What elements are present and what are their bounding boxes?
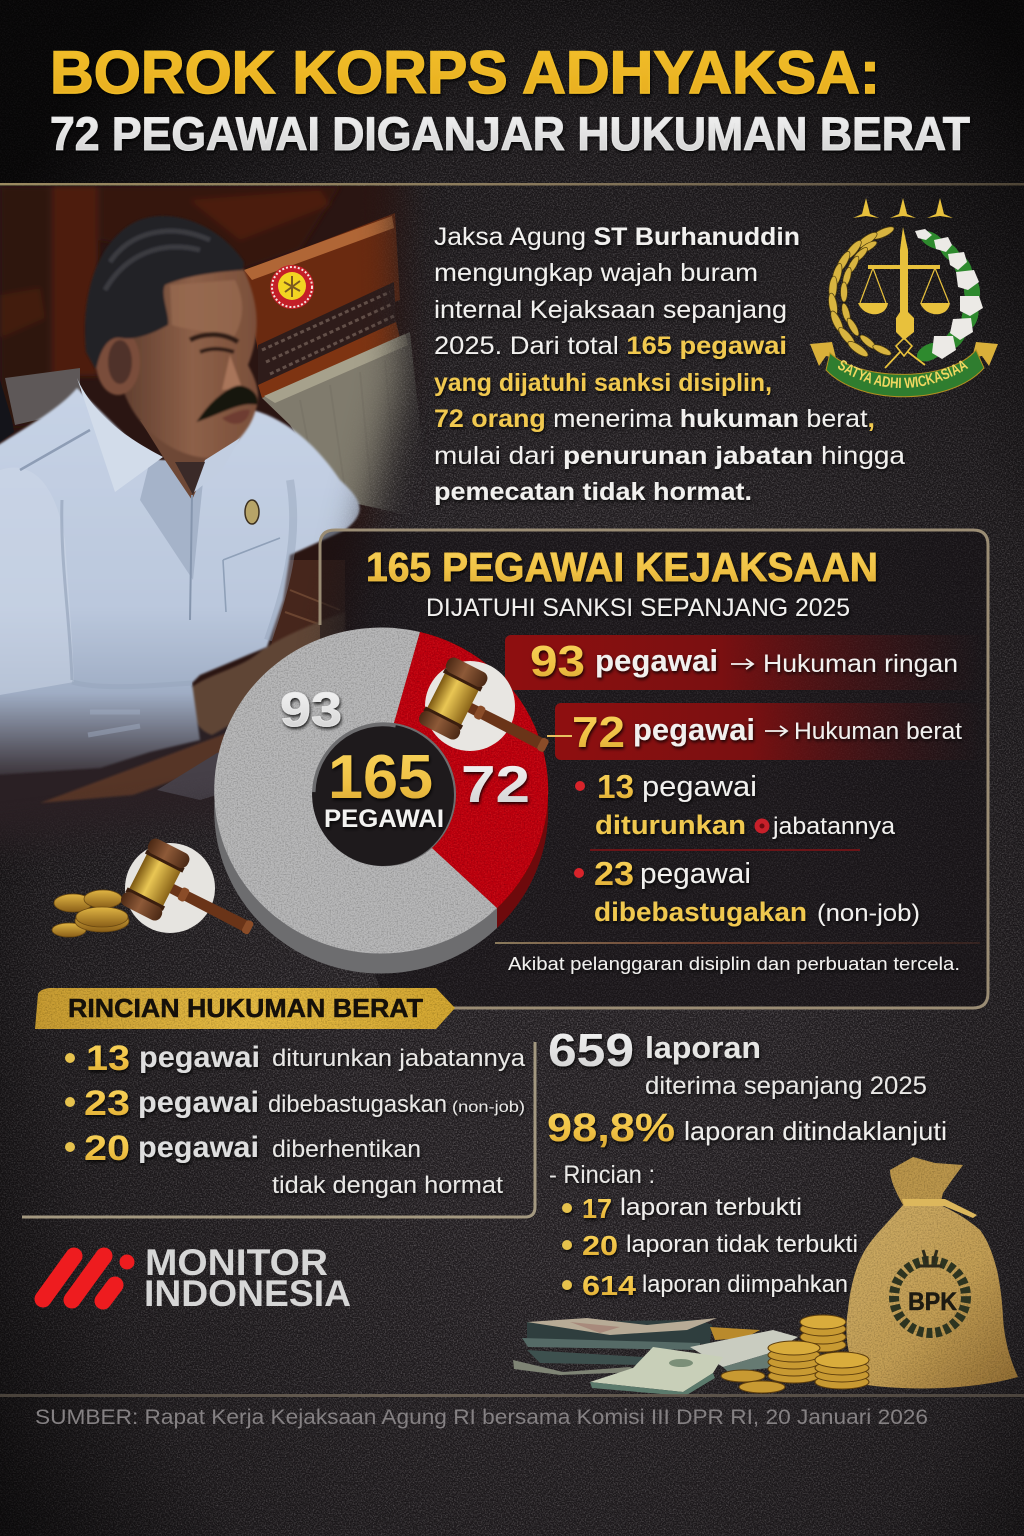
statistics: laporan: laporan terbukti: [620, 1194, 802, 1221]
title: 72 PEGAWAI DIGANJAR HUKUMAN BERAT: [50, 107, 970, 160]
banner: hukuman ringan: 93: [530, 637, 585, 686]
intro paragraph: pemecatan tidak hormat.: [434, 478, 752, 506]
donut chart: 93 vs 72: [214, 628, 572, 974]
panel: rincian list: 13: [86, 1039, 130, 1078]
panel: rincian list: pegawai: [139, 1041, 260, 1074]
statistics: laporan: 98,8%: [547, 1106, 675, 1150]
statistics: laporan: 659: [548, 1024, 634, 1076]
panel: rincian list: diturunkan jabatannya: [272, 1045, 526, 1072]
intro paragraph: 72 orang menerima hukuman berat,: [434, 405, 875, 433]
illustration: BPK money bag: BPK: [908, 1288, 957, 1316]
banner: hukuman ringan: Hukuman ringan: [763, 650, 958, 678]
intro paragraph: [434, 223, 905, 506]
banner: hukuman ringan: [505, 635, 985, 690]
statistics: laporan: [547, 1024, 947, 1301]
statistics: laporan: diterima sepanjang 2025: [645, 1072, 927, 1100]
statistics: laporan: 17: [582, 1193, 612, 1224]
neck: [140, 420, 214, 498]
panel: 165 pegawai: [320, 530, 988, 1008]
chair back: [242, 213, 400, 350]
intro paragraph: mengungkap wajah buram: [434, 259, 758, 287]
intro paragraph: internal Kejaksaan sepanjang: [434, 296, 787, 324]
statistics: laporan: - Rincian :: [549, 1161, 655, 1189]
head and hair: [85, 216, 258, 458]
statistics: laporan: 20: [582, 1230, 618, 1261]
intro paragraph: yang dijatuhi sanksi disiplin,: [434, 369, 772, 397]
emblem: Kejaksaan: [810, 198, 998, 398]
ribbon: rincian hukuman berat: [35, 988, 455, 1029]
statistics: laporan: laporan tidak terbukti: [626, 1231, 858, 1258]
icon: gavel on donut: [417, 655, 564, 780]
collar: [77, 378, 163, 492]
donut labels: [280, 684, 530, 833]
sanction list: pegawai: [642, 771, 757, 803]
intro paragraph: 2025. Dari total 165 pegawai: [434, 332, 787, 360]
sanction list: diturunkan: [595, 810, 746, 840]
footer line: [0, 1394, 1024, 1397]
banner: hukuman berat: pegawai: [633, 712, 755, 747]
intro paragraph: mulai dari penurunan jabatan hingga: [434, 442, 905, 470]
lower furniture: [0, 726, 228, 844]
panel: rincian list: tidak dengan hormat: [272, 1172, 503, 1199]
ribbon: rincian hukuman berat: RINCIAN HUKUMAN BERAT: [68, 993, 423, 1023]
sanction list: jabatannya: [772, 813, 896, 840]
panel: rincian list: [22, 1039, 535, 1217]
sanction list: [574, 768, 920, 927]
donut labels: 72: [461, 756, 530, 814]
panel: rincian list: (non-job): [452, 1099, 525, 1116]
donut labels: 93: [280, 684, 342, 737]
banner: hukuman berat: Hukuman berat: [794, 718, 962, 745]
panel footnote: Akibat pelanggaran disiplin dan perbuatan tercela.: [508, 954, 960, 974]
panel heading: 165 PEGAWAI KEJAKSAAN: [366, 544, 878, 590]
panel: rincian list: diberhentikan: [272, 1136, 421, 1163]
panel: rincian list: pegawai: [138, 1086, 259, 1119]
statistics: laporan: laporan ditindaklanjuti: [684, 1116, 947, 1146]
sanction list: dibebastugakan: [594, 897, 807, 927]
panel: rincian list: 23: [84, 1084, 130, 1123]
title: BOROK KORPS ADHYAKSA:: [50, 39, 880, 106]
sanction list: (non-job): [817, 900, 920, 927]
sanction list: pegawai: [640, 858, 751, 890]
illustration: BPK money bag: [846, 1157, 1018, 1388]
banner: hukuman berat: [555, 703, 985, 760]
hand and forearm: [188, 612, 345, 735]
source: SUMBER: Rapat Kerja Kejaksaan Agung RI bersama Komisi III DPR RI, 20 Januari 2026: [35, 1406, 928, 1429]
panel: rincian list: 20: [84, 1129, 130, 1168]
shirt: [0, 388, 360, 775]
statistics: laporan: laporan: [645, 1030, 761, 1065]
donut labels: PEGAWAI: [324, 805, 444, 833]
emblem: Kejaksaan: SATYA ADHI WICKASIAA: [838, 360, 968, 388]
logo: Monitor Indonesia: [43, 1242, 351, 1314]
sanction list: 13: [597, 768, 634, 805]
illustration: coin stacks: [721, 1315, 869, 1393]
logo: Monitor Indonesia: MONITOR: [145, 1242, 328, 1283]
illustration: banknotes: [513, 1318, 798, 1396]
banner: hukuman berat: 72: [572, 708, 625, 757]
sanction list: 23: [594, 855, 634, 892]
statistics: laporan: 614: [582, 1270, 636, 1301]
intro paragraph: Jaksa Agung ST Burhanuddin: [434, 223, 800, 251]
title: [50, 39, 970, 160]
banner: hukuman ringan: pegawai: [595, 643, 718, 678]
panel: rincian list: dibebastugaskan: [268, 1091, 447, 1118]
statistics: laporan: laporan diimpahkan: [642, 1271, 848, 1298]
logo: Monitor Indonesia: INDONESIA: [144, 1273, 351, 1314]
icon: gavel and coins: [52, 836, 268, 962]
donut labels: 165: [328, 743, 433, 812]
panel heading: [366, 544, 878, 622]
panel heading: DIJATUHI SANKSI SEPANJANG 2025: [426, 594, 850, 622]
panel: rincian list: pegawai: [138, 1131, 259, 1164]
photo: Jaksa Agung ST Burhanuddin: [0, 186, 421, 850]
